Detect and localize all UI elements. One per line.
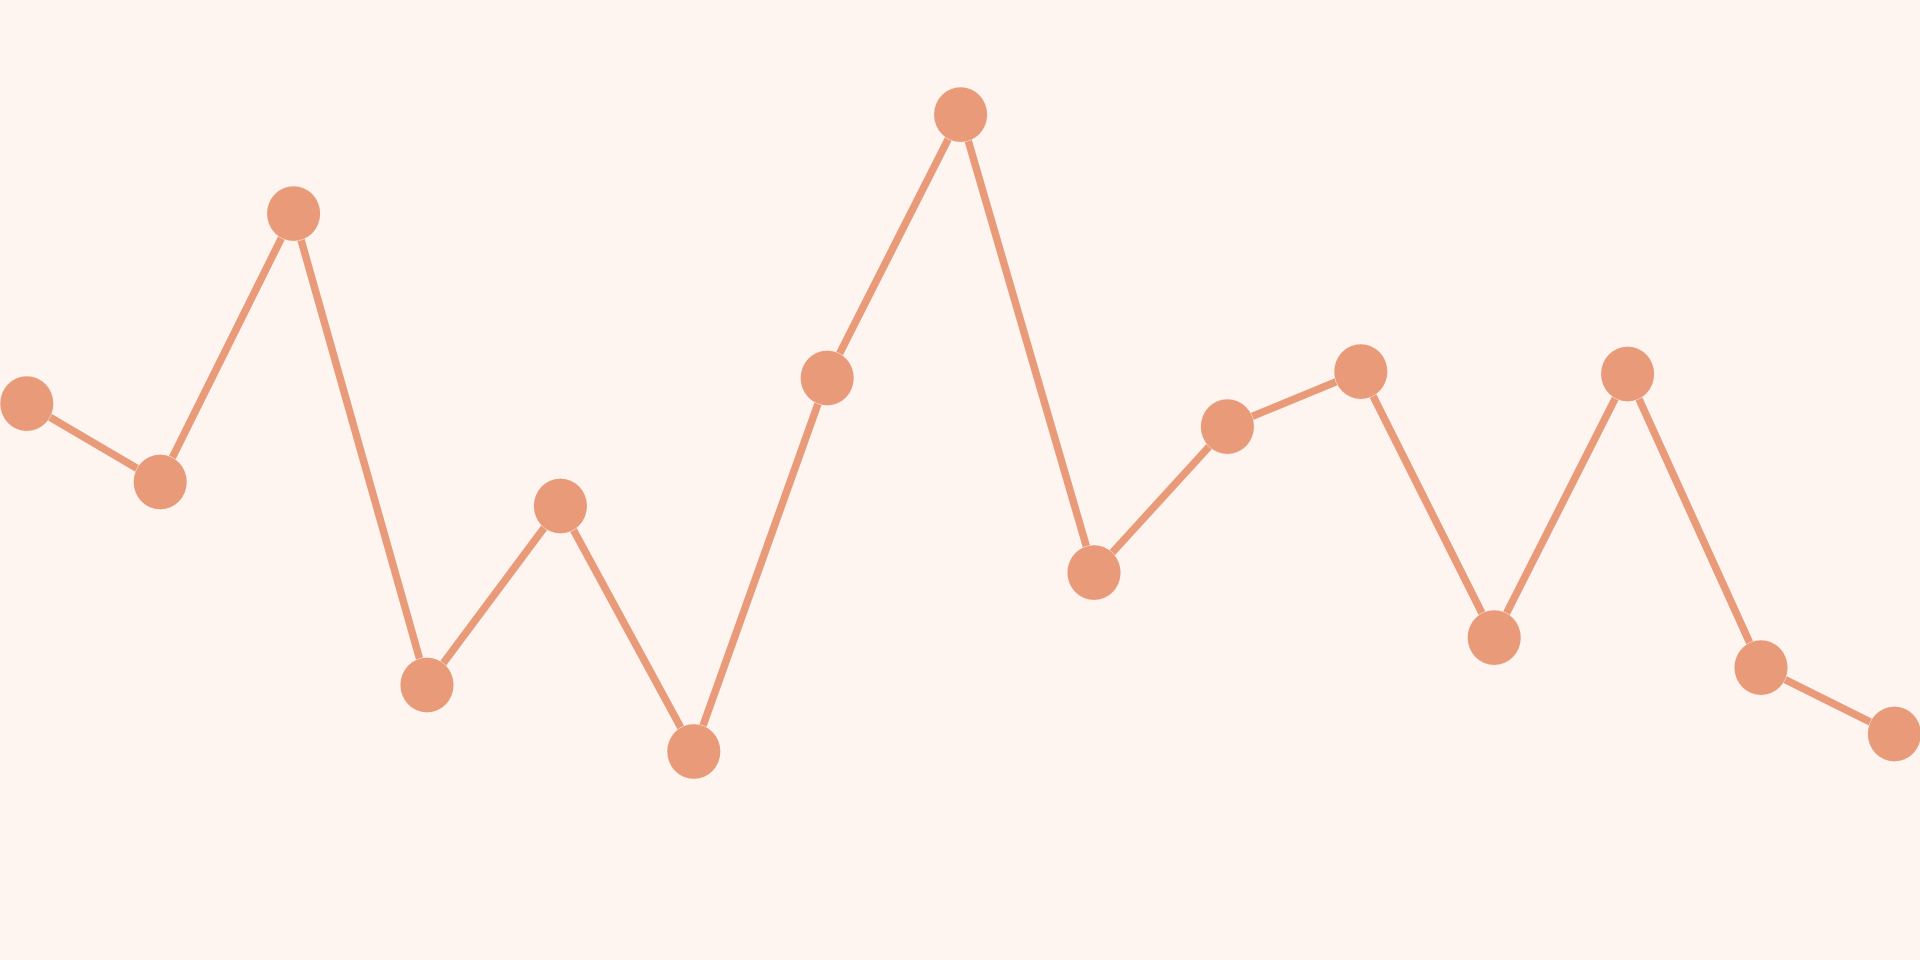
data points (0, 87, 1920, 779)
connecting line (27, 115, 1894, 752)
